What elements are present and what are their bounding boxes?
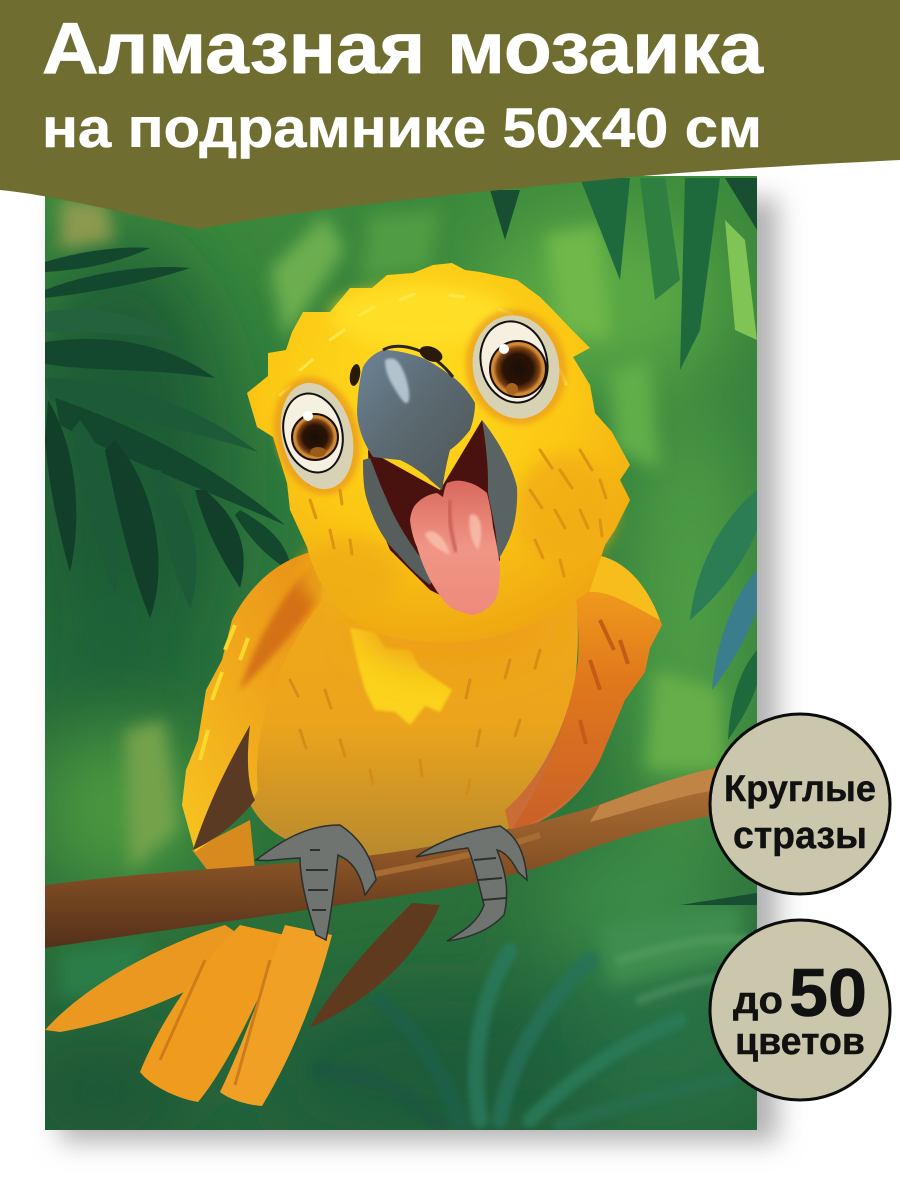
banner [0,0,900,229]
palm fronds right top [490,178,757,370]
badge: up to 50 colours [710,920,890,1100]
right foot [416,826,527,941]
left foot [256,825,376,940]
left eye [270,374,362,497]
lower beak [363,420,517,585]
tongue [410,481,500,615]
tail feathers [45,820,332,1106]
title line 1: Алмазная мозаика [42,9,764,89]
badge: round rhinestones: стразы [733,815,867,857]
badge: up to 50 colours: цветов [735,1021,865,1063]
right eye [463,307,568,426]
badge: round rhinestones: Круглые [724,768,876,809]
body [250,584,600,856]
badge: up to 50 colours: 50 [789,955,867,1031]
left wing [182,550,322,852]
bottom foliage strokes [320,939,750,1125]
title line 2: на подрамнике 50х40 см [42,96,762,159]
mouth interior [368,420,500,610]
badge: round rhinestones [710,714,890,894]
right wing [510,554,662,832]
jungle background [10,176,780,1140]
upper beak [348,343,475,490]
dark feather [310,903,440,1027]
head [247,263,630,643]
canvas drop shadow [60,198,778,1142]
palm fronds left [45,248,292,618]
leaves right lower [680,490,757,905]
badge: up to 50 colours: до [733,980,783,1022]
branch [45,768,716,948]
painting: parrot on branch [10,176,780,1140]
